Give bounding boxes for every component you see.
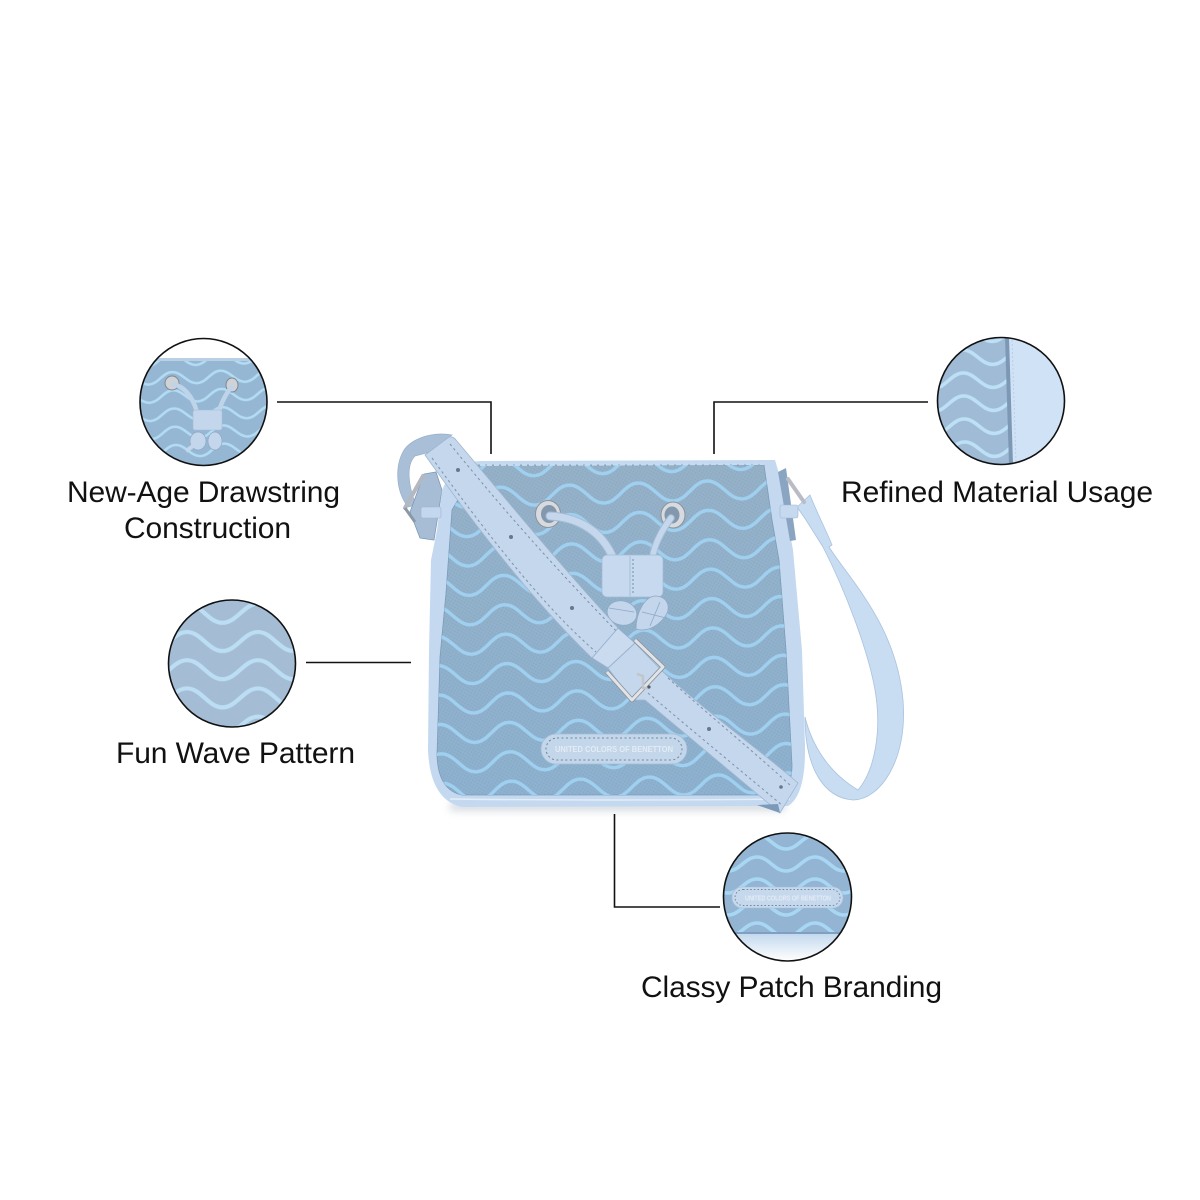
left eyelet — [536, 500, 560, 528]
detail circle: material — [937, 337, 1066, 465]
detail circle: patch branding — [723, 833, 853, 961]
strap tail shadow — [757, 804, 780, 813]
right ring and tab hardware — [778, 468, 804, 541]
bag shadow — [450, 802, 785, 811]
label: patch branding: Classy Patch Branding — [641, 971, 942, 1004]
wave-printed fabric panel — [430, 455, 800, 800]
detail circle: drawstring — [140, 338, 268, 468]
brand patch — [541, 734, 687, 764]
label: drawstring — [67, 476, 340, 545]
left ring and tab hardware — [405, 476, 441, 522]
left back strap — [398, 434, 452, 507]
product: blue drawstring crossbody bag — [398, 434, 904, 813]
strap keeper loop — [592, 628, 635, 668]
strap stitching — [432, 444, 792, 806]
label: material: Refined Material Usage — [841, 476, 1153, 509]
bottom trim highlight — [450, 799, 790, 800]
right shoulder strap loop — [797, 495, 904, 800]
leader line: patch — [614, 814, 720, 907]
leader line: drawstring — [277, 402, 491, 454]
brand patch: UNITED COLORS OF BENETTON — [555, 745, 673, 754]
bag body trim — [428, 460, 805, 807]
leader line: material — [714, 402, 928, 454]
label: wave pattern: Fun Wave Pattern — [116, 737, 355, 770]
detail circle: wave pattern — [168, 600, 296, 728]
cord knots — [604, 596, 668, 630]
right eyelet — [661, 502, 685, 528]
drawstring cords — [550, 516, 671, 560]
label: drawstring: New-Age Drawstring — [67, 476, 340, 509]
crossbody front strap — [425, 437, 798, 813]
strap holes — [456, 468, 783, 789]
left hardware strip — [410, 472, 442, 540]
silver buckle — [607, 640, 663, 700]
leader line: wave pattern — [306, 662, 411, 664]
label: drawstring: Construction — [124, 512, 291, 545]
cord stopper tab — [602, 555, 663, 597]
top edge stitching — [480, 464, 764, 465]
detail circle: patch branding: UNITED COLORS OF BENETTON — [745, 896, 831, 902]
